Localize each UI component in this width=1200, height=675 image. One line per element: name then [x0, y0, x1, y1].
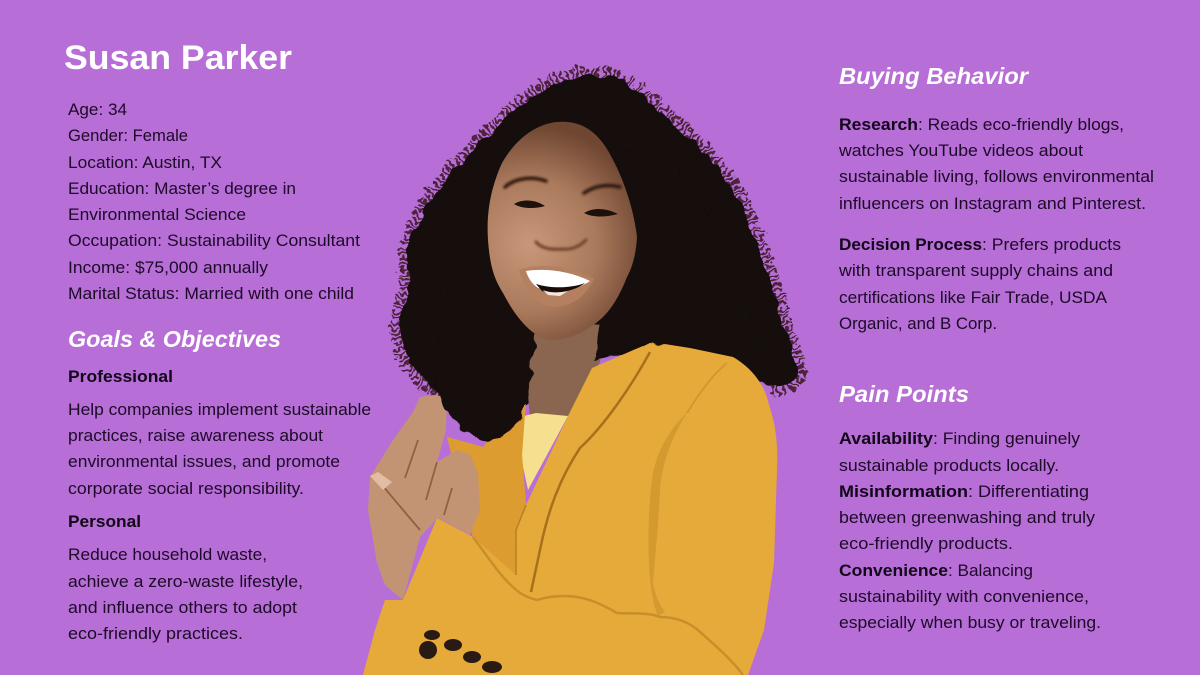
right hair over the collar — [595, 150, 760, 360]
demographics list: Location: Austin, TX — [68, 153, 222, 172]
demographics list: Income: $75,000 annually — [68, 258, 269, 277]
pain point: convenience — [839, 561, 1101, 632]
sleeve fold shadow — [648, 413, 687, 616]
pain point: availability: : Finding genuinely — [933, 429, 1081, 448]
pain point: availability: Availability — [839, 429, 934, 448]
pain point: availability — [839, 429, 1081, 475]
professional goals — [68, 367, 371, 498]
eyes — [514, 200, 618, 216]
decision process paragraph: : Prefers products — [982, 235, 1121, 254]
face — [488, 122, 637, 340]
heading: goals and objectives: Goals & Objectives — [68, 326, 281, 352]
shoulder seam — [687, 363, 727, 413]
portrait photo: woman in yellow blazer — [363, 75, 798, 675]
forearm fold — [473, 537, 743, 675]
professional goals: corporate social responsibility. — [68, 479, 304, 498]
hand with raised fingers — [368, 395, 480, 600]
heading: pain points: Pain Points — [839, 381, 969, 407]
personal goals: eco-friendly practices. — [68, 624, 243, 643]
smiling mouth — [519, 266, 594, 307]
title: Susan Parker — [64, 39, 292, 77]
pain point: misinformation: Misinformation — [839, 482, 968, 501]
inner lapel — [447, 385, 527, 575]
research paragraph: sustainable living, follows environmental — [839, 167, 1154, 186]
professional goals: Help companies implement sustainable — [68, 400, 371, 419]
curly hair fringe — [400, 75, 798, 396]
pain point: convenience: sustainability with convenience, — [839, 587, 1089, 606]
lapel edge — [516, 505, 526, 575]
jacket buttons — [419, 630, 502, 673]
research paragraph: influencers on Instagram and Pinterest. — [839, 194, 1146, 213]
decision process paragraph: with transparent supply chains and — [838, 261, 1113, 280]
personal goals: achieve a zero-waste lifestyle, — [68, 572, 303, 591]
demographics list: Environmental Science — [68, 205, 246, 224]
research paragraph — [838, 115, 1154, 213]
research paragraph: watches YouTube videos about — [838, 141, 1083, 160]
demographics list: Education: Master’s degree in — [68, 179, 296, 198]
pain point: availability: sustainable products locally. — [839, 456, 1059, 475]
decision process paragraph: Decision Process — [839, 235, 982, 254]
demographics list: Marital Status: Married with one child — [68, 284, 354, 303]
personal goals: Personal — [68, 512, 141, 531]
decision process paragraph: certifications like Fair Trade, USDA — [839, 288, 1108, 307]
pain point: convenience: especially when busy or traveling. — [839, 613, 1101, 632]
pain point: convenience: : Balancing — [948, 561, 1033, 580]
heading: buying behavior: Buying Behavior — [839, 63, 1029, 89]
demographics list: Age: 34 — [68, 100, 127, 119]
decision process paragraph — [838, 235, 1121, 333]
research paragraph: Research — [839, 115, 918, 134]
pain point: misinformation: eco-friendly products. — [839, 534, 1013, 553]
front hair falling over the blazer — [438, 280, 535, 441]
pain point: misinformation: : Differentiating — [968, 482, 1089, 501]
demographics list: Occupation: Sustainability Consultant — [68, 231, 360, 250]
personal goals — [68, 512, 303, 643]
demographics list: Gender: Female — [68, 126, 188, 145]
research paragraph: : Reads eco-friendly blogs, — [918, 115, 1124, 134]
personal goals: Reduce household waste, — [68, 545, 267, 564]
professional goals: Professional — [68, 367, 173, 386]
pain point: convenience: Convenience — [839, 561, 948, 580]
pain point: misinformation — [839, 482, 1096, 553]
neck — [522, 320, 604, 420]
personal goals: and influence others to adopt — [68, 598, 297, 617]
decision process paragraph: Organic, and B Corp. — [839, 314, 997, 333]
yellow blazer — [363, 342, 777, 675]
pale yellow top — [520, 413, 568, 490]
eyebrows — [505, 178, 620, 193]
hair mass behind the figure — [400, 75, 798, 434]
professional goals: environmental issues, and promote — [68, 452, 340, 471]
professional goals: practices, raise awareness about — [68, 426, 323, 445]
demographics list — [68, 100, 360, 303]
pain point: misinformation: between greenwashing and truly — [839, 508, 1096, 527]
lapel shadow — [531, 352, 650, 592]
nose — [536, 240, 586, 249]
